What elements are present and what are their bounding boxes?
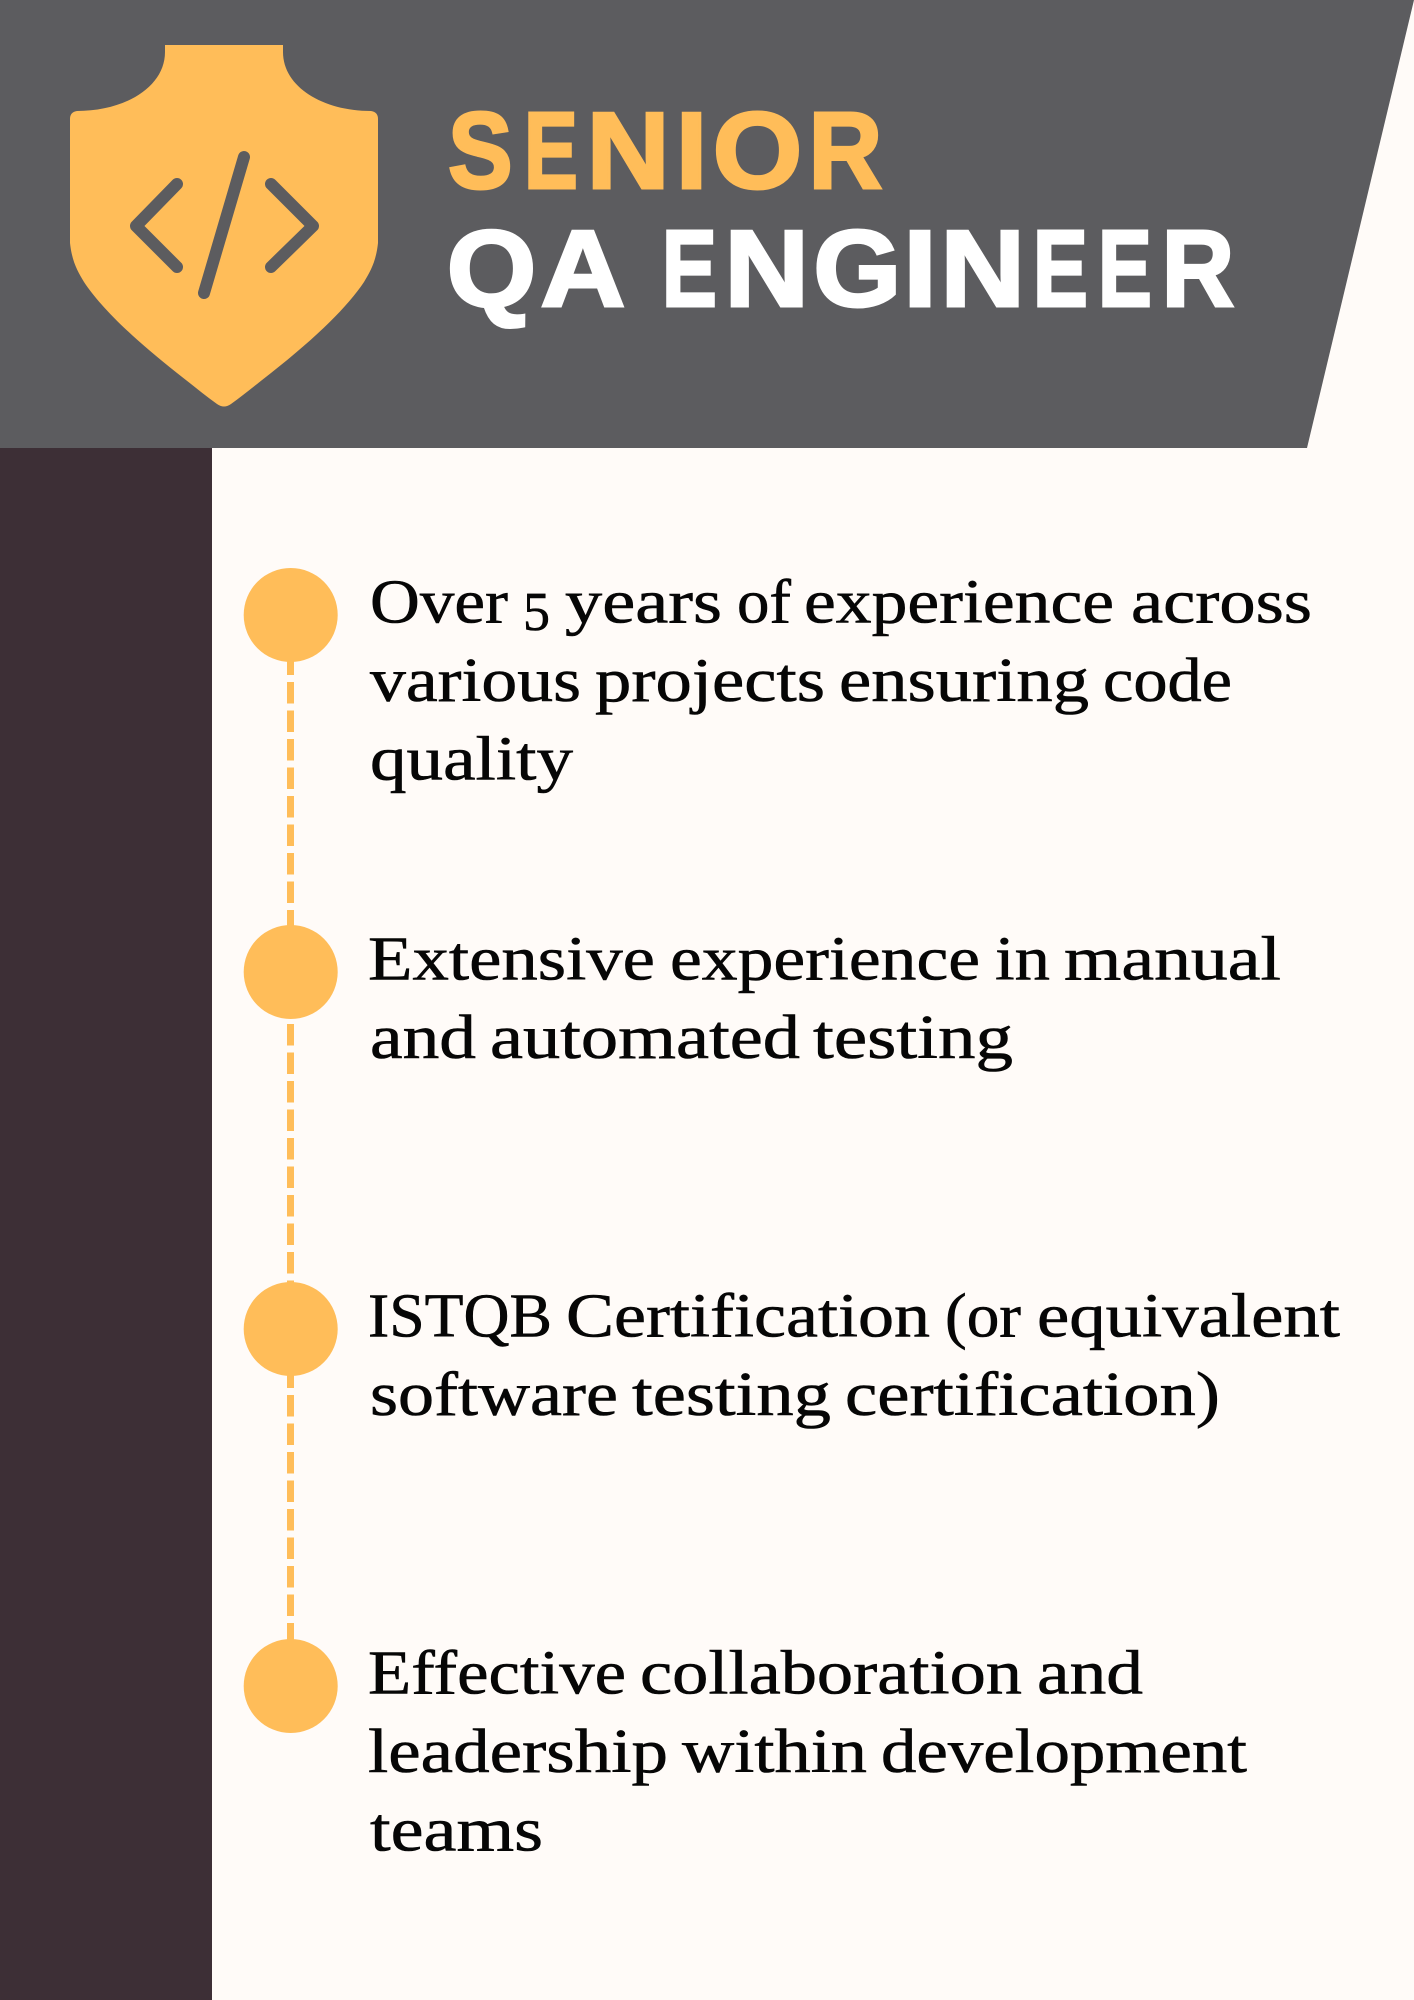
sidebar: [0, 448, 212, 2000]
title: E: [662, 208, 717, 330]
header banner: [0, 0, 1414, 448]
title: A: [540, 208, 622, 330]
text block: experience: code: [1103, 647, 1232, 715]
icon: shield with code symbol: [70, 45, 378, 406]
text block: certification: software: [370, 1361, 618, 1429]
text block: collaboration: development: [881, 1718, 1247, 1786]
title: I: [676, 90, 707, 212]
title: O: [713, 90, 802, 212]
title: R: [808, 90, 882, 212]
text block: testing: experience: [670, 926, 980, 994]
text block: collaboration: within: [682, 1718, 867, 1786]
text block: certification: [368, 1283, 1340, 1429]
text block: certification: ISTQB: [368, 1283, 552, 1351]
text block: experience: quality: [370, 726, 573, 794]
timeline connector: [287, 654, 294, 1644]
title: Q: [447, 208, 536, 330]
timeline marker 1: [244, 568, 338, 662]
text block: experience: years: [565, 569, 722, 637]
text block: experience: various: [370, 647, 581, 715]
title: E: [524, 90, 578, 212]
text block: experience: Over: [370, 569, 508, 637]
title: R: [1162, 208, 1234, 330]
text block: collaboration: and: [1037, 1640, 1143, 1708]
title: E: [1033, 208, 1088, 330]
text block: certification: testing: [632, 1361, 831, 1429]
text block: certification: Certification: [566, 1283, 930, 1351]
text block: testing: manual: [1064, 926, 1281, 994]
text block: experience: ensuring: [839, 647, 1089, 715]
timeline marker 3: [244, 1282, 338, 1376]
timeline marker 2: [244, 925, 338, 1019]
title: N: [587, 90, 670, 212]
text block: collaboration: collaboration: [640, 1640, 1022, 1708]
text block: certification: certification): [845, 1361, 1220, 1429]
text block: experience: projects: [595, 647, 825, 715]
text block: experience: [370, 569, 1312, 794]
text block: testing: testing: [813, 1004, 1013, 1072]
text block: testing: and: [370, 1004, 476, 1072]
title: S: [448, 90, 513, 212]
text block: experience: across: [1131, 569, 1312, 637]
text block: experience: of: [737, 569, 791, 637]
title: G: [813, 208, 901, 330]
text block: collaboration: teams: [370, 1796, 543, 1864]
timeline marker 4: [244, 1639, 338, 1733]
text block: testing: [368, 926, 1281, 1072]
text block: experience: experience: [804, 569, 1114, 637]
text block: collaboration: Effective: [368, 1640, 626, 1708]
title: I: [903, 208, 937, 330]
text block: certification: (or: [945, 1283, 1021, 1351]
text block: testing: automated: [490, 1004, 800, 1072]
title: N: [940, 208, 1025, 330]
text block: collaboration: [368, 1640, 1247, 1864]
title: [447, 90, 1234, 330]
text block: experience: 5: [523, 581, 550, 642]
title: N: [724, 208, 809, 330]
text block: testing: in: [995, 926, 1050, 994]
text block: certification: equivalent: [1037, 1283, 1340, 1351]
text block: testing: Extensive: [368, 926, 655, 994]
title: E: [1098, 208, 1152, 330]
text block: collaboration: leadership: [368, 1718, 668, 1786]
